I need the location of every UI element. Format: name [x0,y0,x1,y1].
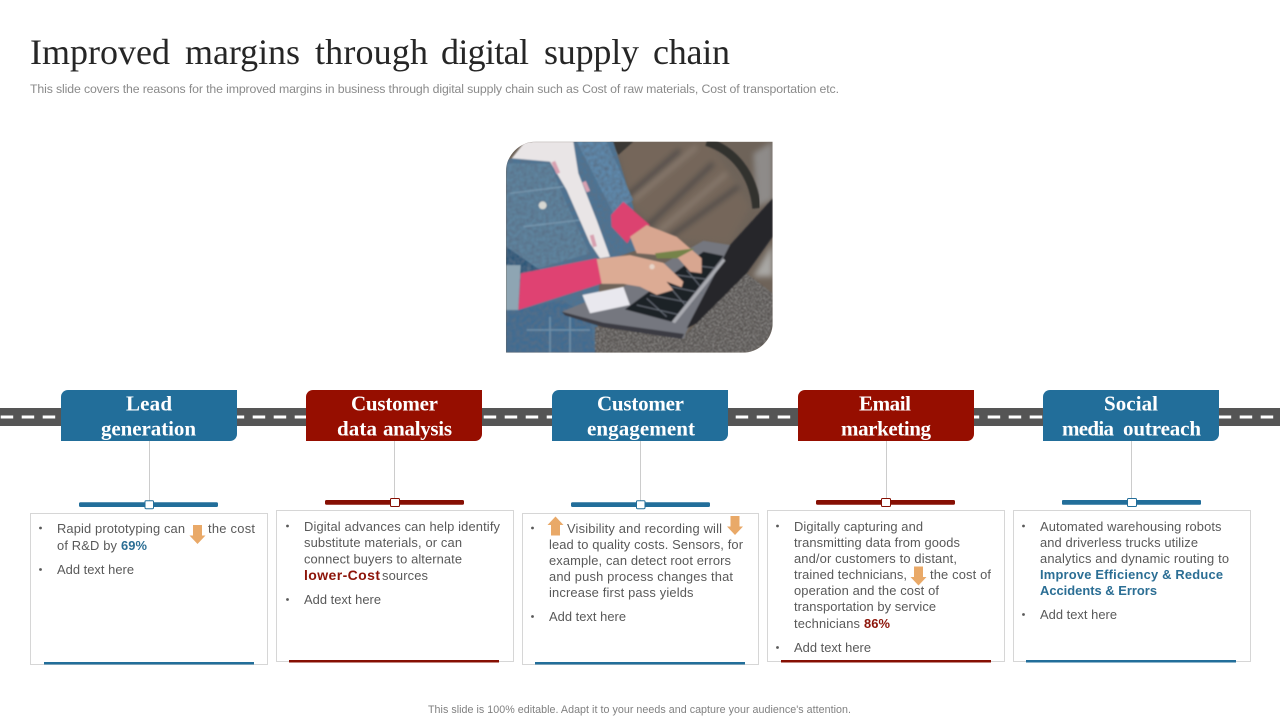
connector [79,441,218,509]
header: Customer engagement [552,390,728,441]
icon: up arrow [548,516,564,536]
card: Social media outreach: Automated warehousing robots [1040,519,1222,534]
title: chain [653,32,730,72]
road [0,408,1280,426]
header: Social media outreach: media [1062,416,1114,440]
icon: down arrow [190,525,206,544]
card: Customer engagement: lead to quality costs. Sensors, for [549,537,744,552]
card: Social media outreach: analytics and dynamic routing to [1040,551,1229,566]
pants [595,273,773,353]
header: Lead generation [61,390,237,441]
card: Customer data analysis [276,510,514,662]
header: Customer engagement: Customer [597,392,684,416]
header: Social media outreach [1043,390,1219,441]
header: Lead generation: generation [101,416,196,440]
card: Email marketing: 86% [864,616,891,631]
card: Email marketing: transmitting data from goods [794,535,960,550]
column 3: Customer engagement [522,390,758,664]
card: Lead generation: the cost [208,521,255,536]
card: Email marketing: Add text here [794,640,871,655]
connector [571,441,710,509]
card: Customer data analysis: connect buyers to alternate [304,551,462,566]
connector [1062,441,1201,506]
card: Customer engagement: increase first pass yields [549,585,694,600]
card: Social media outreach [1014,510,1250,662]
hands [597,255,683,295]
header: Social media outreach: outreach [1123,416,1201,440]
subtitle: This slide covers the reasons for the improved margins in business through digital supply chain such as Cost of raw materials, Cost of transportation etc. [30,82,839,96]
card: Customer engagement: Visibility and recording will [567,521,722,536]
card: Email marketing: trained technicians, [794,567,907,582]
header: Lead generation: Lead [126,392,172,416]
card: Customer data analysis: Add text here [304,592,381,607]
card: Lead generation: Rapid prototyping can [57,521,185,536]
header: Customer data analysis [306,390,482,441]
column 5: Social media outreach [1014,390,1250,662]
card: Email marketing: Digitally capturing and [794,519,923,534]
pink sleeves [518,258,602,310]
header: Customer engagement: engagement [587,416,695,440]
card: Social media outreach: and driverless trucks utilize [1040,535,1198,550]
card: Social media outreach: Add text here [1040,607,1117,622]
header: Customer data analysis: Customer [351,392,438,416]
photo: woman typing on a laptop [506,142,773,353]
card: Email marketing: operation and the cost of [794,583,939,598]
card: Customer data analysis: substitute materials, or can [304,535,462,550]
card: Email marketing: technicians [794,616,860,631]
card: Customer engagement: example, can detect root errors [549,553,731,568]
header: Email marketing: Email [859,392,911,416]
header: Customer data analysis: analysis [383,416,452,440]
card: Customer data analysis: sources [382,568,428,583]
footer note: This slide is 100% editable. Adapt it to your needs and capture your audience's attention. [428,704,851,716]
card: Customer engagement: and push process changes that [549,569,733,584]
title: digital [441,32,529,72]
icon: down arrow [727,516,743,535]
card: Lead generation: of R&D by [57,538,118,553]
card: Customer engagement: Add text here [549,609,626,624]
scarf [512,142,610,258]
card: Lead generation: Add text here [57,562,134,577]
card: Social media outreach: Improve Efficiency & Reduce [1040,567,1223,582]
laptop [562,241,730,338]
header: Customer data analysis: data [337,416,378,440]
icon: down arrow [910,566,926,586]
card: Lead generation: 69% [121,538,148,553]
connector [325,441,464,506]
title: Improved [30,32,170,72]
card: Email marketing: and/or customers to distant, [794,551,957,566]
header: Social media outreach: Social [1104,392,1158,416]
column 2: Customer data analysis [276,390,514,662]
card: Customer data analysis: Digital advances can help identify [304,519,501,534]
title: supply [544,32,639,72]
header: Email marketing: marketing [841,416,932,440]
column 4: Email marketing [768,390,1004,662]
paper [582,287,630,313]
card: Email marketing: transportation by service [794,599,936,614]
card: Customer data analysis: lower-Cost [304,567,380,583]
connector [816,441,955,506]
card: Email marketing: the cost of [930,567,991,582]
card: Customer engagement [522,514,758,664]
denim [506,142,637,353]
column 1: Lead generation [30,390,268,664]
card: Email marketing [768,510,1004,662]
card: Lead generation [30,514,268,664]
title [30,32,730,72]
header: Email marketing [798,390,974,441]
title: margins [185,32,300,72]
card: Social media outreach: Accidents & Errors [1040,583,1157,598]
title: through [315,32,428,72]
